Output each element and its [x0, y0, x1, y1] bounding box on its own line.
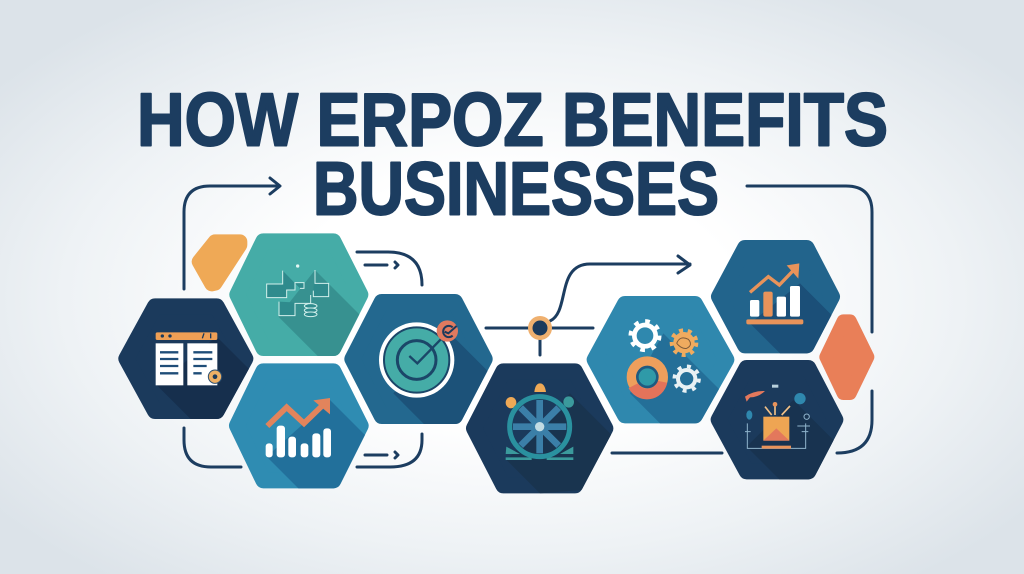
panel: navy hexagon with helm wheel [466, 363, 614, 494]
accent: orange diamond [826, 321, 868, 393]
title: HOW ERPOZ BENEFITS [137, 78, 888, 162]
left hexagon cluster [126, 241, 540, 490]
icon: gears [631, 321, 699, 394]
panel: blue hexagon with growth chart [228, 363, 369, 488]
panel: teal hexagon with process icon [229, 233, 368, 356]
connector node [528, 316, 552, 340]
title [137, 78, 888, 230]
panel: dark blue hexagon with target icon [344, 294, 493, 424]
panel: dark blue hexagon with bar chart [710, 240, 840, 354]
icon: helm wheel [506, 383, 574, 459]
connector lines and arrows [184, 178, 872, 467]
right hexagon cluster [474, 248, 877, 493]
icon: document [156, 332, 222, 385]
icon: circuit box [745, 385, 810, 449]
accent: yellow hexagon [199, 242, 240, 284]
title: BUSINESSES [313, 146, 719, 230]
icon: bars and trend arrow [266, 398, 331, 457]
panel: navy hexagon with circuit icon [710, 360, 844, 480]
icon: target with check [379, 320, 458, 398]
icon: process blocks [267, 264, 329, 317]
panel: navy hexagon with document icon [118, 298, 254, 419]
panel: blue hexagon with gears [595, 304, 760, 430]
icon: bar chart with arrow [746, 263, 803, 324]
infographic canvas [118, 92, 886, 494]
